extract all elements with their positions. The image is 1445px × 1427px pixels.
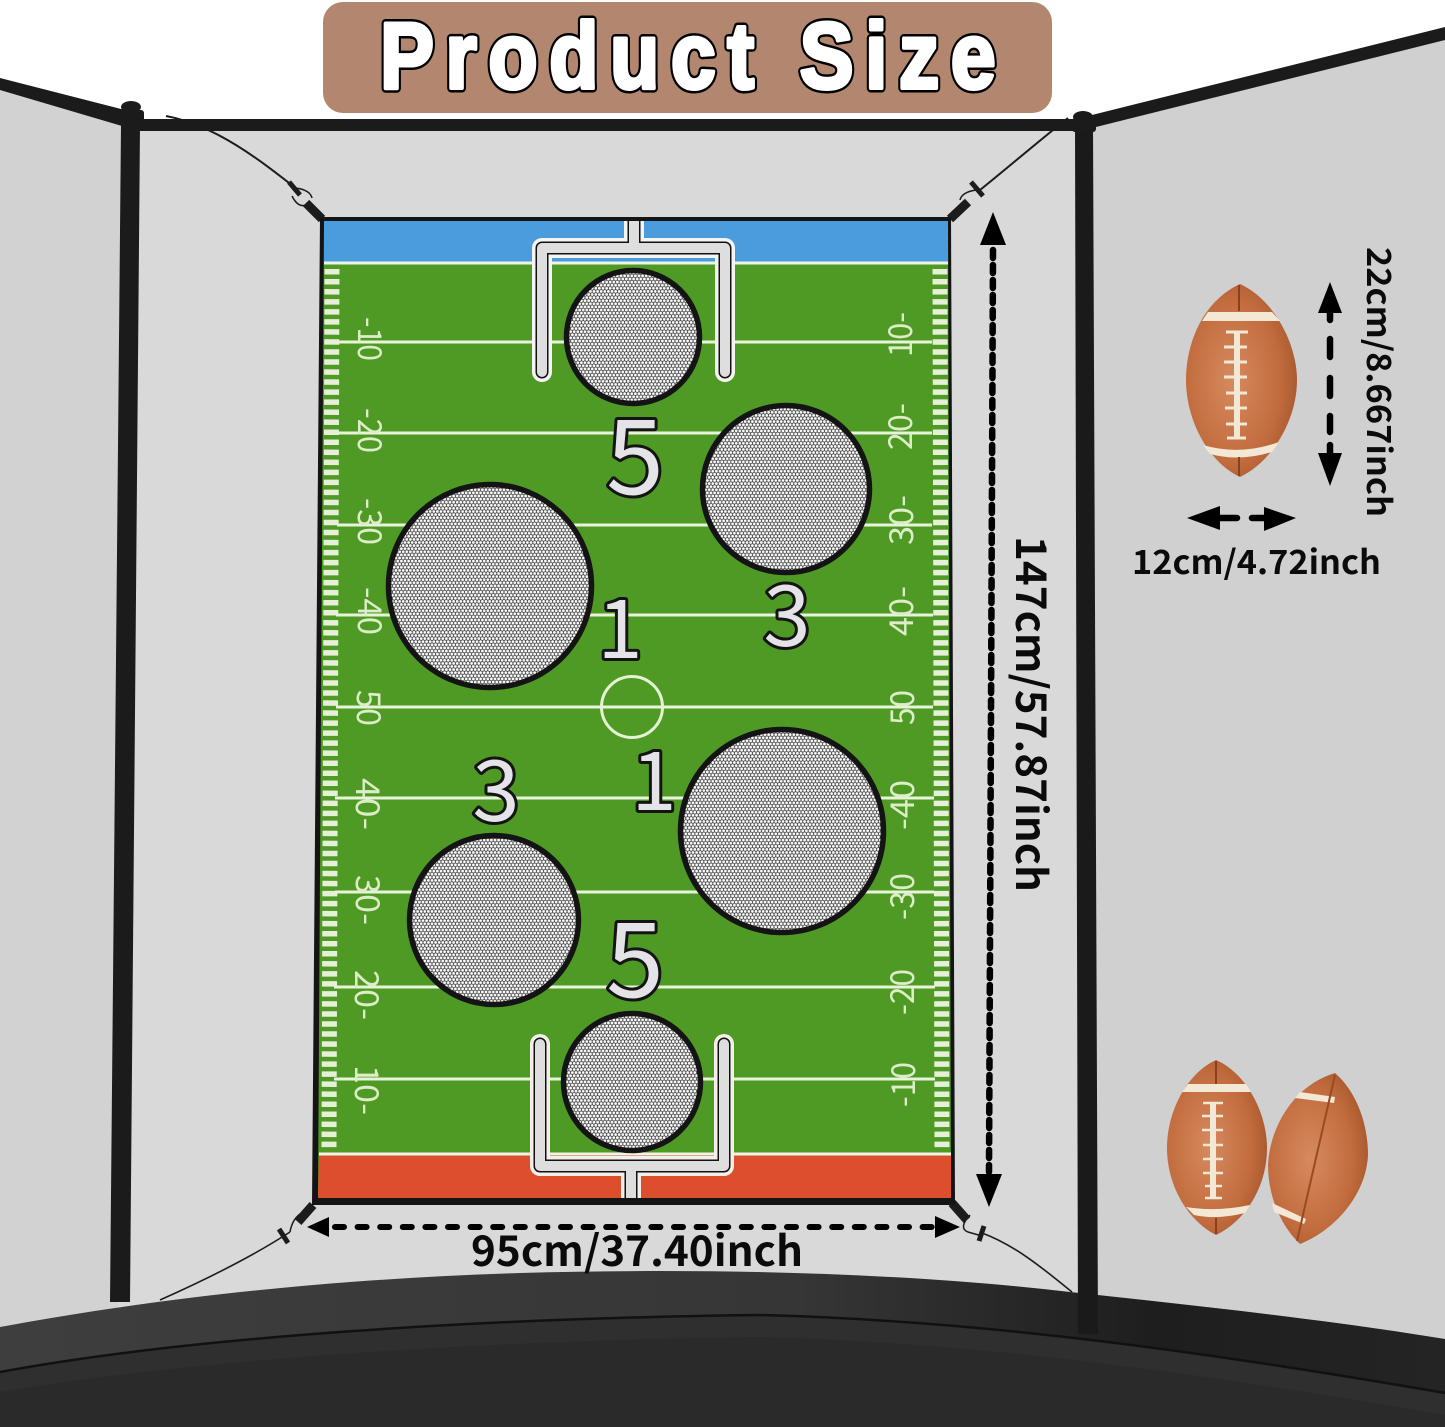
- football width label: 12cm/4.72inch: [1132, 536, 1381, 584]
- right yard numbers: -30: [876, 873, 924, 920]
- blue end zone: [324, 221, 948, 262]
- tether: bottom right: [952, 1203, 1072, 1292]
- left ball bottom stripe: [1186, 1205, 1250, 1217]
- right yard numbers: 20-: [874, 403, 922, 450]
- right ball: [1268, 1073, 1368, 1244]
- end lines: [319, 263, 951, 1154]
- left yard numbers: 40-: [346, 778, 394, 830]
- score hole: upper right 3 point: [702, 406, 870, 572]
- tether: bottom left: [160, 1205, 313, 1300]
- right yard numbers: -40: [876, 780, 924, 830]
- left yard numbers: 10-: [345, 1065, 393, 1115]
- right yard numbers: -20: [876, 969, 924, 1015]
- right yard numbers: [874, 312, 925, 1107]
- left yard numbers: -40: [348, 587, 396, 635]
- title badge: [323, 2, 1052, 113]
- left yard numbers: 30-: [346, 875, 394, 925]
- panel: right netting wall: [1085, 38, 1445, 1345]
- score hole: top 5 point: [566, 270, 700, 404]
- right ball seam: [1297, 1075, 1335, 1241]
- left pole: [110, 125, 140, 1302]
- right ball body: [1268, 1073, 1368, 1244]
- score hole: lower left 3 point: [410, 836, 578, 1004]
- trampoline frame and mat: [0, 1271, 1445, 1427]
- seams: [1238, 285, 1240, 476]
- score number 3 lower: 3: [472, 723, 520, 846]
- yard lines: [334, 342, 935, 1079]
- ball body: [1186, 284, 1297, 477]
- trampoline mat: [0, 1337, 1445, 1427]
- title background: [323, 2, 1052, 113]
- left pole joint: [120, 110, 144, 126]
- down arrowhead: [976, 1174, 1002, 1207]
- up arrowhead: [980, 212, 1006, 245]
- left sloped top band: [0, 78, 145, 131]
- right yard numbers: 40-: [875, 586, 923, 636]
- right pole cap: [1073, 111, 1093, 123]
- right arrowhead: [1264, 507, 1296, 531]
- left yard numbers: -10: [348, 317, 396, 361]
- score number 3 upper: 3: [763, 548, 811, 671]
- panel: centre netting wall: [118, 128, 1085, 1340]
- right yard numbers: -10: [877, 1062, 925, 1107]
- right pole: [1075, 125, 1098, 1334]
- left arrowhead: [1187, 506, 1220, 530]
- left ball: [1167, 1060, 1267, 1235]
- bottom goal post: [540, 1044, 724, 1198]
- right yard numbers: 50: [876, 690, 924, 725]
- right yard numbers: 10-: [874, 312, 922, 357]
- target border: [312, 217, 955, 1205]
- left yard numbers: -30: [348, 498, 396, 545]
- title text: Product Size: [380, 3, 996, 108]
- top stripe: [1202, 312, 1280, 321]
- left ball body: [1167, 1060, 1267, 1235]
- score hole: lower right 1 point: [680, 730, 884, 932]
- top goal post: [542, 221, 725, 372]
- dashed stem: [1220, 515, 1264, 521]
- width label: 95cm/37.40inch: [471, 1218, 803, 1279]
- red end zone: [318, 1155, 951, 1198]
- football pair: [1167, 1060, 1368, 1244]
- left pole cap: [121, 101, 141, 113]
- left ball top stripe: [1182, 1084, 1251, 1092]
- bottom stripe: [1203, 442, 1279, 458]
- height dimension arrow: [976, 212, 1006, 1207]
- right sloped top band: [1080, 27, 1445, 132]
- height label: 147cm/57.87inch: [1003, 536, 1064, 892]
- dotted height line: [989, 250, 993, 1172]
- trampoline lower rim: [0, 1315, 1445, 1427]
- right ball top stripe: [1295, 1092, 1335, 1103]
- score number 1 lower: 1: [632, 717, 676, 834]
- centre top band: [140, 119, 1085, 131]
- tether: top left: [166, 116, 322, 219]
- score number 1 upper: 1: [598, 565, 642, 682]
- left ball seam: [1215, 1061, 1217, 1234]
- laces: [1224, 331, 1248, 438]
- trampoline padded rim: [0, 1271, 1445, 1427]
- tether: top right: [950, 118, 1068, 219]
- score hole: bottom 5 point: [564, 1014, 700, 1150]
- football width arrow: [1187, 506, 1296, 531]
- right arrowhead: [935, 1216, 960, 1238]
- score number 5 bottom: 5: [606, 876, 664, 1027]
- football: single ball: [1186, 284, 1297, 477]
- left yard numbers: [345, 317, 396, 1115]
- football height label: 22cm/8.667inch: [1357, 247, 1405, 517]
- right yard numbers: 30-: [875, 495, 923, 545]
- sideline hash marks: [329, 269, 942, 1150]
- green field: [318, 221, 951, 1198]
- right ball bottom stripe: [1272, 1203, 1306, 1224]
- title outline: Product Size: [380, 3, 996, 108]
- left yard numbers: 20-: [345, 970, 393, 1020]
- panel: left netting wall: [0, 88, 132, 1340]
- left ball laces: [1202, 1103, 1223, 1198]
- left arrowhead: [307, 1217, 329, 1237]
- centre circle: [602, 676, 662, 738]
- left yard numbers: 50: [347, 690, 395, 726]
- score hole: upper left 1 point: [388, 484, 592, 688]
- score number 5 top: 5: [606, 373, 664, 524]
- right pole joint: [1072, 118, 1096, 132]
- up arrowhead: [1318, 282, 1342, 313]
- football height arrow: [1318, 282, 1342, 486]
- width dimension arrow: [307, 1216, 960, 1238]
- left yard numbers: -20: [348, 408, 396, 453]
- dashed stem: [1327, 313, 1333, 455]
- down arrowhead: [1318, 453, 1342, 486]
- dotted width line: [335, 1224, 932, 1230]
- football field target: [312, 217, 955, 1205]
